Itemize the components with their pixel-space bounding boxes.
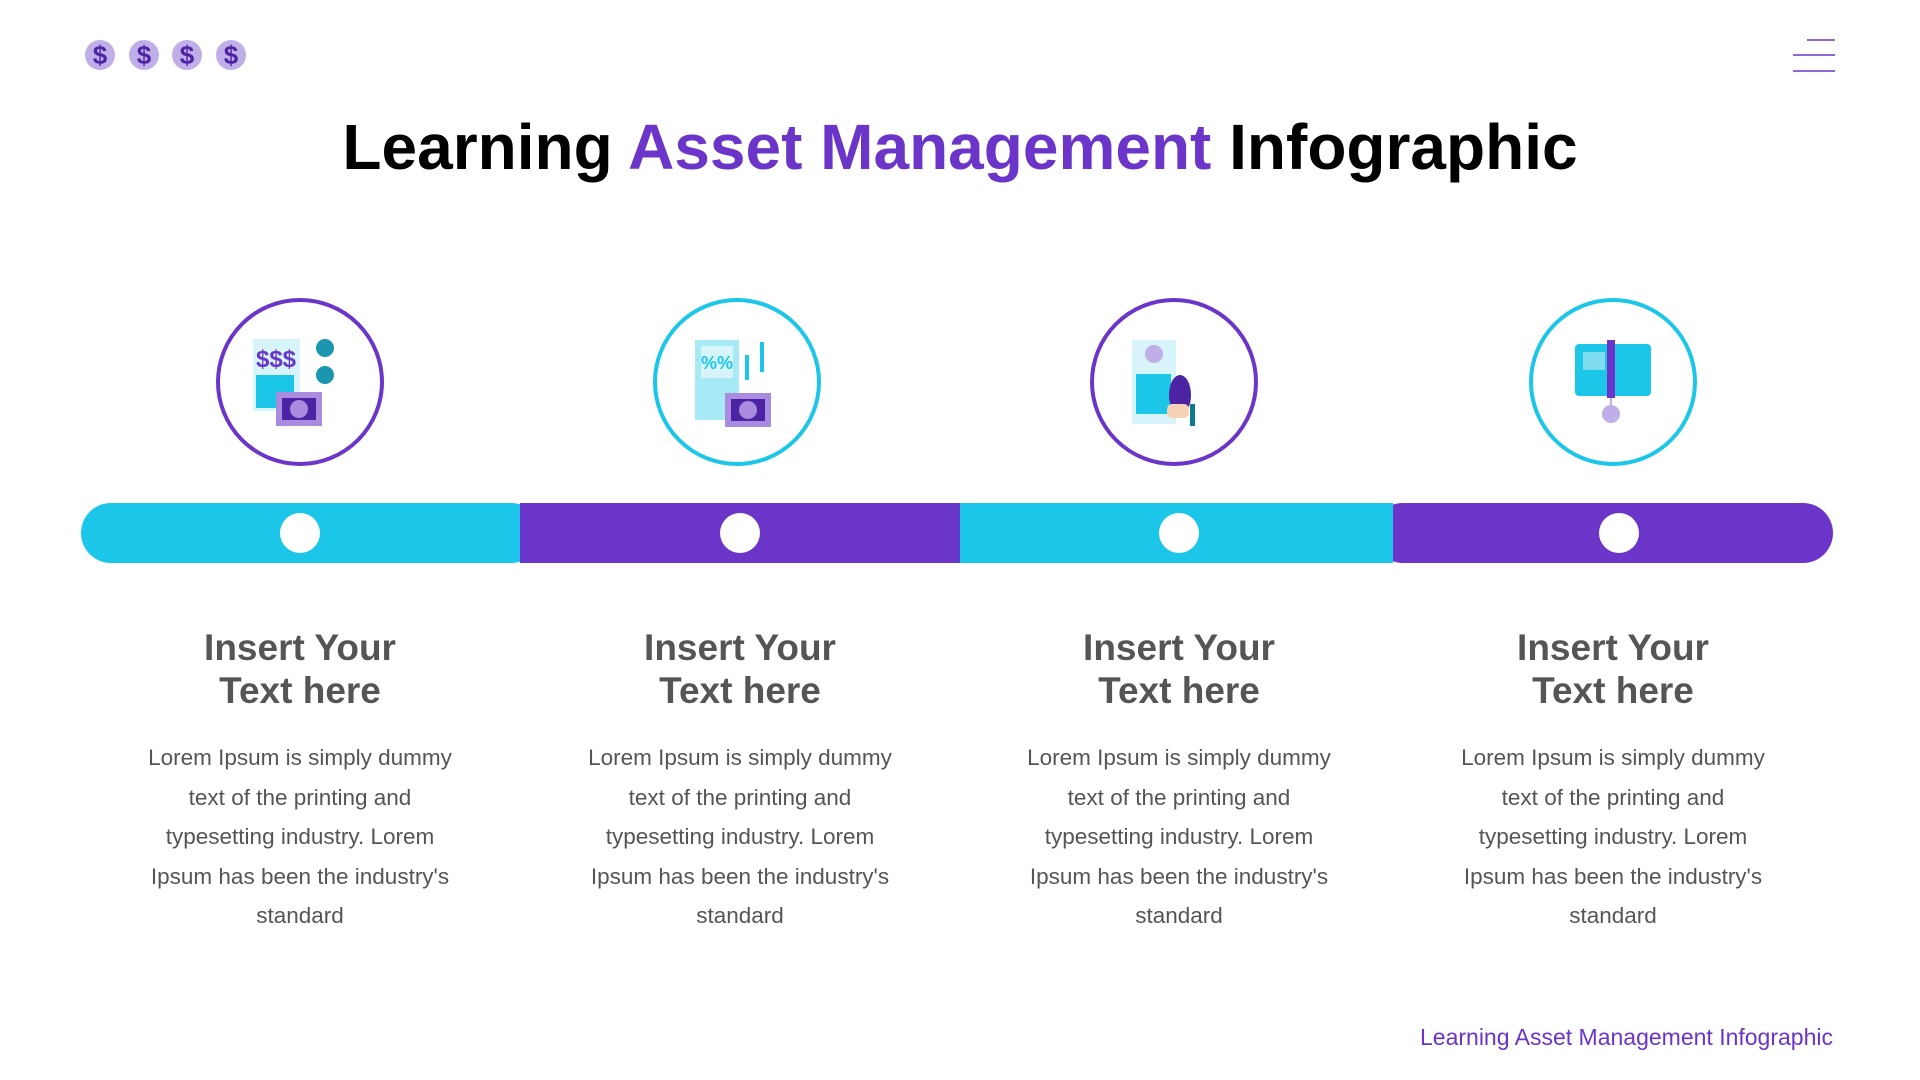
- title: Learning Asset Management Infographic: [342, 111, 1578, 183]
- heading 1: [204, 627, 396, 711]
- text 2: Ipsum has been the industry's: [591, 864, 889, 888]
- heading 4: Text here: [1532, 670, 1694, 711]
- heading 2: [644, 627, 836, 711]
- text 4: Ipsum has been the industry's: [1464, 864, 1762, 888]
- text 1: [148, 745, 452, 928]
- heading 4: [1517, 627, 1709, 711]
- text 1: typesetting industry. Lorem: [166, 824, 434, 849]
- text 1: text of the printing and: [189, 784, 411, 810]
- text 1: standard: [256, 903, 344, 928]
- icons: coin row: $: [180, 40, 195, 70]
- text 1: Lorem Ipsum is simply dummy: [148, 745, 452, 770]
- icon: percent growth: %%: [701, 353, 733, 373]
- icons: coin row: $: [93, 40, 108, 70]
- text 2: text of the printing and: [629, 784, 851, 810]
- text 4: text of the printing and: [1502, 784, 1724, 810]
- text 2: Lorem Ipsum is simply dummy: [588, 745, 892, 770]
- timeline bar: [81, 503, 1833, 563]
- heading 3: Text here: [1098, 670, 1260, 711]
- icon: percent growth: [655, 300, 819, 464]
- text 3: [1027, 745, 1331, 928]
- text 2: [588, 745, 892, 928]
- icon: money bag in hand: [1092, 300, 1256, 464]
- heading 3: [1083, 627, 1275, 711]
- text 3: text of the printing and: [1068, 784, 1290, 810]
- heading 3: Insert Your: [1083, 627, 1275, 668]
- icon: bills with checks: [218, 300, 382, 464]
- text 4: Lorem Ipsum is simply dummy: [1461, 745, 1765, 770]
- heading 2: Insert Your: [644, 627, 836, 668]
- text 3: standard: [1135, 903, 1223, 928]
- icon: bills with checks: $$$: [256, 346, 297, 373]
- text 4: [1461, 745, 1765, 928]
- heading 1: Insert Your: [204, 627, 396, 668]
- text 1: Ipsum has been the industry's: [151, 864, 449, 888]
- text 4: standard: [1569, 903, 1657, 928]
- footer: Learning Asset Management Infographic: [1420, 1024, 1833, 1050]
- text 3: Ipsum has been the industry's: [1030, 864, 1328, 888]
- icons: coin row: $: [137, 40, 152, 70]
- heading 2: Text here: [659, 670, 821, 711]
- icon: locked card: [1531, 300, 1695, 464]
- text 2: standard: [696, 903, 784, 928]
- text 4: typesetting industry. Lorem: [1479, 824, 1747, 849]
- text 3: typesetting industry. Lorem: [1045, 824, 1313, 849]
- text 2: typesetting industry. Lorem: [606, 824, 874, 849]
- icon circles: [216, 298, 1697, 466]
- icons: coin row: $: [224, 40, 239, 70]
- icon: menu: [1793, 39, 1835, 72]
- text 3: Lorem Ipsum is simply dummy: [1027, 745, 1331, 770]
- heading 4: Insert Your: [1517, 627, 1709, 668]
- heading 1: Text here: [219, 670, 381, 711]
- icons: coin row: [85, 40, 246, 70]
